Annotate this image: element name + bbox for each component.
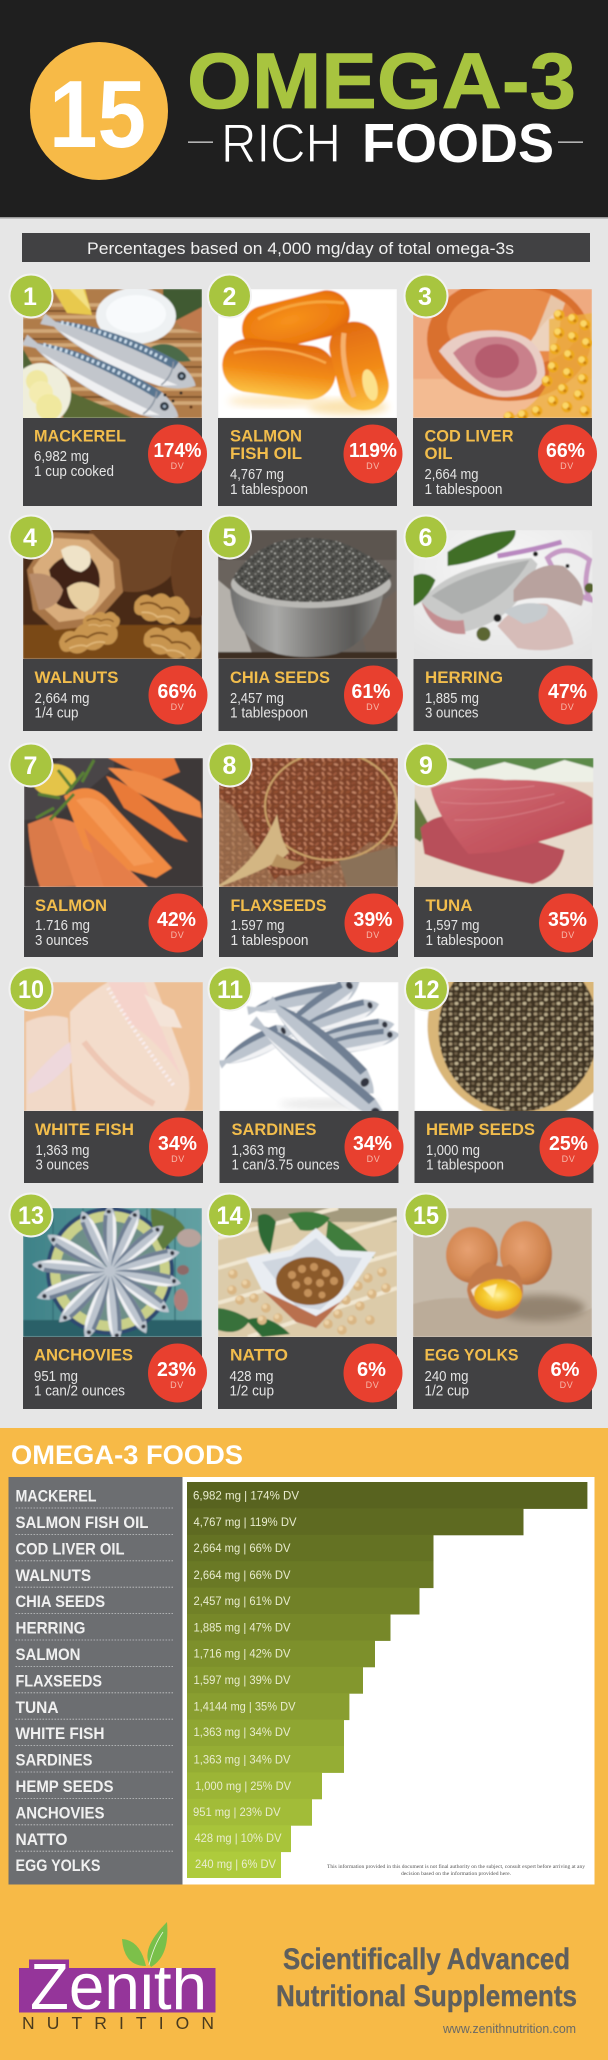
number badge: 10 bbox=[18, 976, 44, 1004]
photo: tuna bbox=[414, 758, 594, 887]
chart labels panel: WHITE FISH bbox=[16, 1725, 104, 1743]
number badge bbox=[10, 1194, 52, 1236]
card 3: cod liver oil bbox=[404, 274, 597, 506]
number badge: 6 bbox=[419, 524, 432, 552]
dv badge: DV bbox=[561, 930, 575, 940]
amount: 1,597 mg bbox=[426, 918, 480, 934]
bar chart: 2,664 mg | 66% DV bbox=[194, 1541, 290, 1555]
serving: 3 ounces bbox=[36, 1158, 89, 1174]
card 4: walnuts bbox=[10, 508, 219, 731]
subtitle bar: Percentages based on 4,000 mg/day of total omega-3s bbox=[87, 240, 514, 258]
serving: 3 ounces bbox=[35, 933, 88, 949]
number badge: 14 bbox=[216, 1202, 243, 1230]
dv badge: DV bbox=[366, 461, 380, 471]
disclaimer: decision based on the information provided here. bbox=[401, 1872, 511, 1877]
number badge: 7 bbox=[24, 752, 37, 780]
dv badge: 42% bbox=[157, 909, 196, 931]
bar chart: 951 mg | 23% DV bbox=[193, 1805, 281, 1819]
chart labels panel: FLAXSEEDS bbox=[16, 1672, 102, 1690]
number badge: 9 bbox=[419, 752, 433, 780]
chart labels panel: SALMON bbox=[16, 1646, 80, 1664]
title: RICH FOODS: FOODS bbox=[362, 112, 554, 174]
dv badge: DV bbox=[366, 930, 380, 940]
serving: 3 ounces bbox=[425, 706, 478, 722]
number badge bbox=[208, 274, 251, 318]
caption panel bbox=[220, 1111, 398, 1183]
food name: COD LIVER bbox=[424, 426, 514, 446]
bar chart: 6,982 mg | 174% DV bbox=[193, 1488, 299, 1502]
amount: 1,000 mg bbox=[426, 1143, 480, 1159]
amount: 1.597 mg bbox=[230, 918, 284, 934]
number badge: 2 bbox=[223, 283, 236, 311]
chart labels panel: HERRING bbox=[16, 1620, 86, 1638]
food name: SALMON bbox=[230, 426, 302, 446]
caption panel bbox=[413, 418, 592, 506]
disclaimer: This information provided in this document is not final authority on the subject, consult expert before arriving at any bbox=[327, 1865, 586, 1870]
photo: anchovies bbox=[23, 1205, 202, 1343]
amount: 1.716 mg bbox=[35, 918, 90, 934]
photo: white fish fillets bbox=[24, 982, 203, 1111]
dv badge: 35% bbox=[548, 909, 587, 931]
logo: Zenith Nutrition: NUTRITION bbox=[22, 2013, 214, 2033]
serving: 1 tablespoon bbox=[426, 933, 504, 949]
amount: 1,363 mg bbox=[36, 1143, 90, 1159]
caption panel bbox=[414, 1111, 594, 1183]
bar chart: 1,597 mg | 39% DV bbox=[194, 1673, 290, 1687]
caption panel bbox=[218, 659, 398, 731]
dv badge bbox=[344, 894, 404, 952]
photo: flaxseeds bbox=[219, 752, 398, 887]
card 8: flaxseeds bbox=[208, 744, 404, 957]
food name: WHITE FISH bbox=[35, 1120, 134, 1139]
card 7: salmon bbox=[10, 744, 208, 957]
website url: www.zenithnutrition.com bbox=[442, 2021, 576, 2036]
dv badge: DV bbox=[171, 930, 184, 940]
dv badge: 66% bbox=[158, 681, 197, 703]
number badge bbox=[208, 968, 252, 1010]
serving: 1 tablespoon bbox=[230, 933, 308, 949]
chart labels panel: SALMON FISH OIL bbox=[16, 1514, 148, 1532]
caption panel bbox=[219, 887, 398, 957]
serving: 1 tablespoon bbox=[424, 482, 502, 498]
card 13: anchovies bbox=[10, 1194, 207, 1409]
number badge: 3 bbox=[418, 283, 432, 311]
food name bbox=[424, 426, 514, 463]
dv badge: 34% bbox=[158, 1133, 197, 1155]
photo: smoked salmon bbox=[24, 758, 203, 887]
dv badge bbox=[344, 424, 402, 484]
card 12: hemp seeds bbox=[404, 966, 598, 1183]
caption panel bbox=[413, 1337, 592, 1409]
number badge: 1 bbox=[23, 283, 37, 311]
card 10: white fish bbox=[10, 968, 208, 1183]
chart labels panel: EGG YOLKS bbox=[16, 1857, 100, 1875]
serving: 1 cup cooked bbox=[34, 464, 114, 480]
caption panel bbox=[23, 418, 202, 506]
photo: mackerel bbox=[23, 289, 202, 418]
amount: 1,885 mg bbox=[425, 691, 479, 707]
bar chart: 428 mg | 10% DV bbox=[194, 1831, 282, 1845]
number badge bbox=[404, 516, 448, 558]
dv badge bbox=[344, 1118, 404, 1176]
dv badge: 34% bbox=[353, 1133, 392, 1155]
food name: CHIA SEEDS bbox=[230, 668, 330, 687]
food name: ANCHOVIES bbox=[34, 1346, 133, 1364]
amount: 2,664 mg bbox=[34, 691, 90, 707]
number badge bbox=[405, 744, 448, 786]
photo: natto bbox=[218, 1208, 397, 1337]
badge: 15: 15 bbox=[49, 61, 146, 168]
number badge bbox=[10, 744, 52, 786]
icon: leaves bbox=[122, 1922, 167, 1967]
subtitle bar bbox=[22, 233, 590, 262]
card 14: natto bbox=[208, 1194, 402, 1409]
number badge bbox=[404, 274, 448, 318]
chart labels panel: SARDINES bbox=[16, 1752, 92, 1770]
title: OMEGA-3: OMEGA-3 bbox=[187, 36, 576, 125]
amount: 951 mg bbox=[34, 1369, 78, 1385]
number badge: 15 bbox=[413, 1202, 439, 1230]
food name: HERRING bbox=[425, 668, 503, 687]
dv badge bbox=[539, 894, 598, 952]
food name: TUNA bbox=[426, 896, 472, 915]
dv badge: DV bbox=[561, 702, 574, 712]
badge: 15 bbox=[30, 42, 168, 180]
card 15: egg yolks bbox=[404, 1194, 597, 1409]
food name: HEMP SEEDS bbox=[426, 1120, 535, 1139]
photo: herring bbox=[414, 530, 594, 659]
header band bbox=[0, 0, 608, 218]
dv badge: 47% bbox=[548, 681, 587, 703]
food name: FISH OIL bbox=[230, 444, 302, 463]
bar chart: 2,457 mg | 61% DV bbox=[194, 1594, 290, 1608]
amount: 2,457 mg bbox=[230, 691, 284, 707]
food name: OIL bbox=[424, 444, 452, 463]
dv badge: 6% bbox=[357, 1359, 386, 1381]
dv badge: 25% bbox=[549, 1133, 588, 1155]
caption panel bbox=[218, 418, 397, 506]
dv badge: DV bbox=[170, 1380, 184, 1390]
logo: Zenith Nutrition bbox=[19, 1922, 216, 2033]
dv badge: 39% bbox=[354, 909, 393, 931]
dv badge: DV bbox=[560, 461, 574, 471]
dv badge: DV bbox=[366, 702, 380, 712]
number badge: 11 bbox=[217, 976, 243, 1004]
photo: walnuts bbox=[23, 530, 202, 659]
serving: 1/2 cup bbox=[424, 1384, 469, 1400]
chart labels panel: WALNUTS bbox=[16, 1567, 91, 1585]
card 5: chia seeds bbox=[208, 516, 403, 731]
dv badge: 119% bbox=[349, 440, 397, 462]
caption panel bbox=[218, 1337, 397, 1409]
serving: 1 tablespoon bbox=[426, 1158, 504, 1174]
photo: eggs bbox=[413, 1208, 592, 1337]
chart labels panel bbox=[8, 1477, 182, 1884]
bar chart: 1,363 mg | 34% DV bbox=[194, 1752, 290, 1766]
dv badge bbox=[148, 424, 207, 484]
chart labels panel: NATTO bbox=[16, 1831, 68, 1849]
dv badge: DV bbox=[171, 702, 184, 712]
title: RICH FOODS: RICH bbox=[221, 112, 341, 174]
number badge bbox=[208, 516, 251, 558]
chart labels panel: CHIA SEEDS bbox=[16, 1593, 105, 1611]
dv badge bbox=[538, 424, 597, 484]
dv badge bbox=[344, 1344, 402, 1402]
bar chart: 2,664 mg | 66% DV bbox=[194, 1568, 290, 1582]
bar chart: 1,363 mg | 34% DV bbox=[194, 1725, 290, 1739]
amount: 2,664 mg bbox=[424, 467, 478, 483]
number badge bbox=[10, 516, 52, 558]
food name: FLAXSEEDS bbox=[230, 896, 326, 915]
chart labels panel: MACKEREL bbox=[16, 1488, 96, 1506]
dv badge: 66% bbox=[546, 440, 585, 462]
caption panel bbox=[23, 659, 202, 731]
amount: 1,363 mg bbox=[232, 1143, 286, 1159]
caption panel bbox=[24, 1111, 203, 1183]
dv badge: 61% bbox=[352, 681, 391, 703]
dv badge bbox=[344, 666, 403, 724]
bar chart: 240 mg | 6% DV bbox=[195, 1857, 276, 1871]
dv badge bbox=[148, 666, 208, 724]
serving: 1 tablespoon bbox=[230, 706, 308, 722]
disclaimer bbox=[327, 1865, 586, 1877]
dv badge: 174% bbox=[154, 440, 202, 462]
number badge bbox=[208, 744, 252, 786]
dv badge: 6% bbox=[550, 1359, 580, 1381]
caption panel bbox=[23, 1337, 202, 1409]
bar chart: 1,885 mg | 47% DV bbox=[194, 1620, 290, 1634]
serving: 1/4 cup bbox=[34, 706, 78, 722]
dv badge bbox=[540, 1118, 598, 1176]
dv badge: DV bbox=[366, 1380, 379, 1390]
caption panel bbox=[414, 887, 593, 957]
chart labels panel: ANCHOVIES bbox=[16, 1804, 104, 1822]
chart labels panel: HEMP SEEDS bbox=[16, 1778, 114, 1796]
dv badge: DV bbox=[171, 1154, 185, 1164]
chart labels panel: TUNA bbox=[16, 1699, 59, 1717]
panel: omega-3 foods chart section bbox=[0, 1428, 608, 2060]
card 11: sardines bbox=[208, 968, 404, 1183]
dv badge: DV bbox=[367, 1154, 380, 1164]
dv badge bbox=[538, 666, 598, 724]
number badge: 4 bbox=[23, 524, 37, 552]
bar chart: 1,4144 mg | 35% DV bbox=[194, 1700, 296, 1714]
card 1: mackerel bbox=[10, 274, 207, 506]
bar chart: 1,000 mg | 25% DV bbox=[195, 1779, 291, 1793]
number badge bbox=[208, 1194, 251, 1236]
amount: 4,767 mg bbox=[230, 467, 284, 483]
number badge: 13 bbox=[18, 1202, 44, 1230]
caption panel bbox=[414, 659, 592, 731]
photo: chia seeds bbox=[218, 530, 397, 659]
bar chart: 1,716 mg | 42% DV bbox=[194, 1646, 290, 1660]
dv badge bbox=[149, 1118, 208, 1176]
photo: hemp seeds bbox=[414, 982, 594, 1111]
serving: 1 tablespoon bbox=[230, 482, 308, 498]
serving: 1 can/2 ounces bbox=[34, 1384, 125, 1400]
amount: 428 mg bbox=[230, 1369, 274, 1385]
card 9: tuna bbox=[405, 744, 598, 957]
caption panel bbox=[24, 887, 203, 957]
chart labels panel: COD LIVER OIL bbox=[16, 1540, 124, 1558]
number badge: 5 bbox=[223, 524, 237, 552]
bar chart bbox=[182, 1477, 594, 1884]
photo: cod liver oil bbox=[413, 289, 592, 418]
number badge bbox=[10, 274, 52, 318]
dv badge: DV bbox=[171, 461, 184, 471]
dv badge bbox=[148, 1344, 207, 1402]
dv badge bbox=[538, 1344, 597, 1402]
food name: SARDINES bbox=[232, 1120, 316, 1139]
amount: 240 mg bbox=[424, 1369, 468, 1385]
dv badge: DV bbox=[560, 1380, 573, 1390]
food name: EGG YOLKS bbox=[424, 1346, 518, 1364]
number badge bbox=[404, 1194, 448, 1236]
food name: MACKEREL bbox=[34, 426, 126, 446]
tagline: Scientifically Advanced bbox=[283, 1943, 570, 1976]
serving: 1/2 cup bbox=[230, 1384, 274, 1400]
amount: 6,982 mg bbox=[34, 449, 89, 465]
food name: SALMON bbox=[35, 896, 107, 915]
dv badge bbox=[148, 894, 208, 952]
dv badge: DV bbox=[562, 1154, 575, 1164]
bar chart: 4,767 mg | 119% DV bbox=[194, 1515, 296, 1529]
food name bbox=[230, 426, 302, 463]
dv badge: 23% bbox=[157, 1359, 196, 1381]
card 2: salmon fish oil bbox=[208, 274, 402, 506]
title: RICH FOODS bbox=[188, 112, 583, 174]
heading: OMEGA-3 FOODS bbox=[11, 1440, 243, 1470]
number badge bbox=[405, 968, 448, 1010]
food name: NATTO bbox=[230, 1346, 288, 1364]
serving: 1 can/3.75 ounces bbox=[232, 1158, 340, 1174]
tagline bbox=[276, 1943, 577, 2013]
number badge bbox=[10, 968, 52, 1010]
photo: sardines bbox=[220, 982, 398, 1111]
number badge: 8 bbox=[223, 752, 237, 780]
photo: fish oil capsules bbox=[218, 285, 397, 418]
number badge: 12 bbox=[414, 976, 440, 1004]
logo: Zenith Nutrition: Zenith bbox=[30, 1950, 207, 2023]
food name: WALNUTS bbox=[34, 668, 118, 687]
card 6: herring bbox=[404, 516, 598, 731]
